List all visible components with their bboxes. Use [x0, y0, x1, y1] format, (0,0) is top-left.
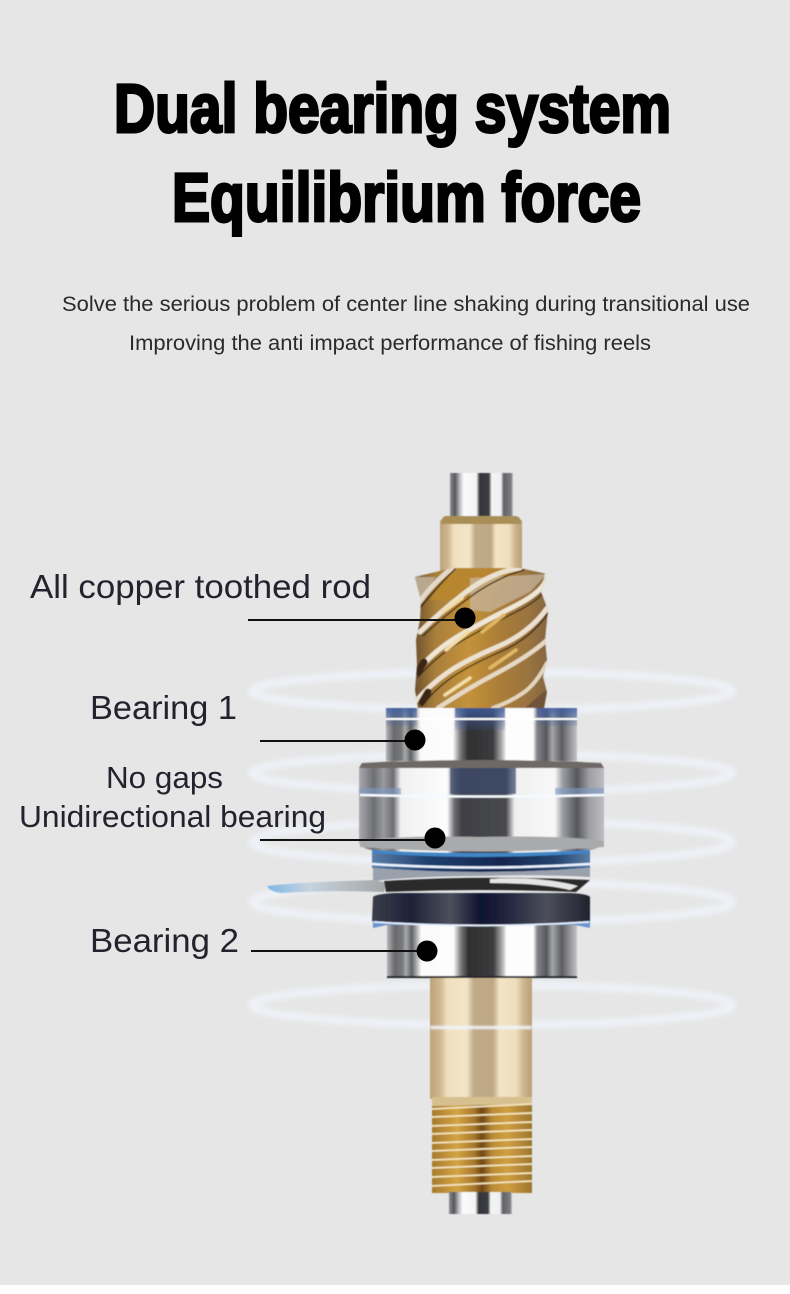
subtitle text: [62, 293, 750, 355]
bottom steel pin: [449, 1192, 512, 1214]
bearing 1: [386, 708, 577, 761]
title: Dual bearing system: [114, 70, 671, 147]
subtitle text: Improving the anti impact performance of fishing reels: [129, 332, 651, 355]
callout: all copper toothed rod: All copper toothed rod: [30, 568, 371, 605]
clip lever: [267, 878, 590, 893]
top steel pin: [450, 473, 513, 516]
callout: no gaps unidirectional bearing: Unidirectional bearing: [19, 799, 326, 834]
brass collar: [440, 516, 522, 574]
blue band: [372, 848, 590, 881]
bearing 2: [387, 925, 577, 978]
callout: bearing 1: Bearing 1: [90, 689, 237, 726]
helical copper gear: [415, 568, 548, 708]
middle large bearing: [359, 760, 604, 853]
lower brass shaft: [430, 977, 532, 1099]
black ring: [372, 893, 590, 928]
callout: bearing 1: [90, 689, 426, 750]
title: Equilibrium force: [172, 159, 641, 236]
callout: no gaps unidirectional bearing: [19, 760, 446, 848]
threaded section: [432, 1097, 532, 1193]
subtitle text: Solve the serious problem of center line shaking during transitional use: [62, 293, 750, 316]
reel shaft assembly: [267, 473, 604, 1214]
energy rings: [252, 672, 732, 1025]
callout: all copper toothed rod: [30, 568, 476, 628]
callout: bearing 2: [90, 922, 438, 962]
callout: no gaps unidirectional bearing: No gaps: [106, 760, 223, 795]
callout: bearing 2: Bearing 2: [90, 922, 239, 959]
title: [114, 70, 671, 236]
lower ring highlight: [430, 1026, 532, 1029]
